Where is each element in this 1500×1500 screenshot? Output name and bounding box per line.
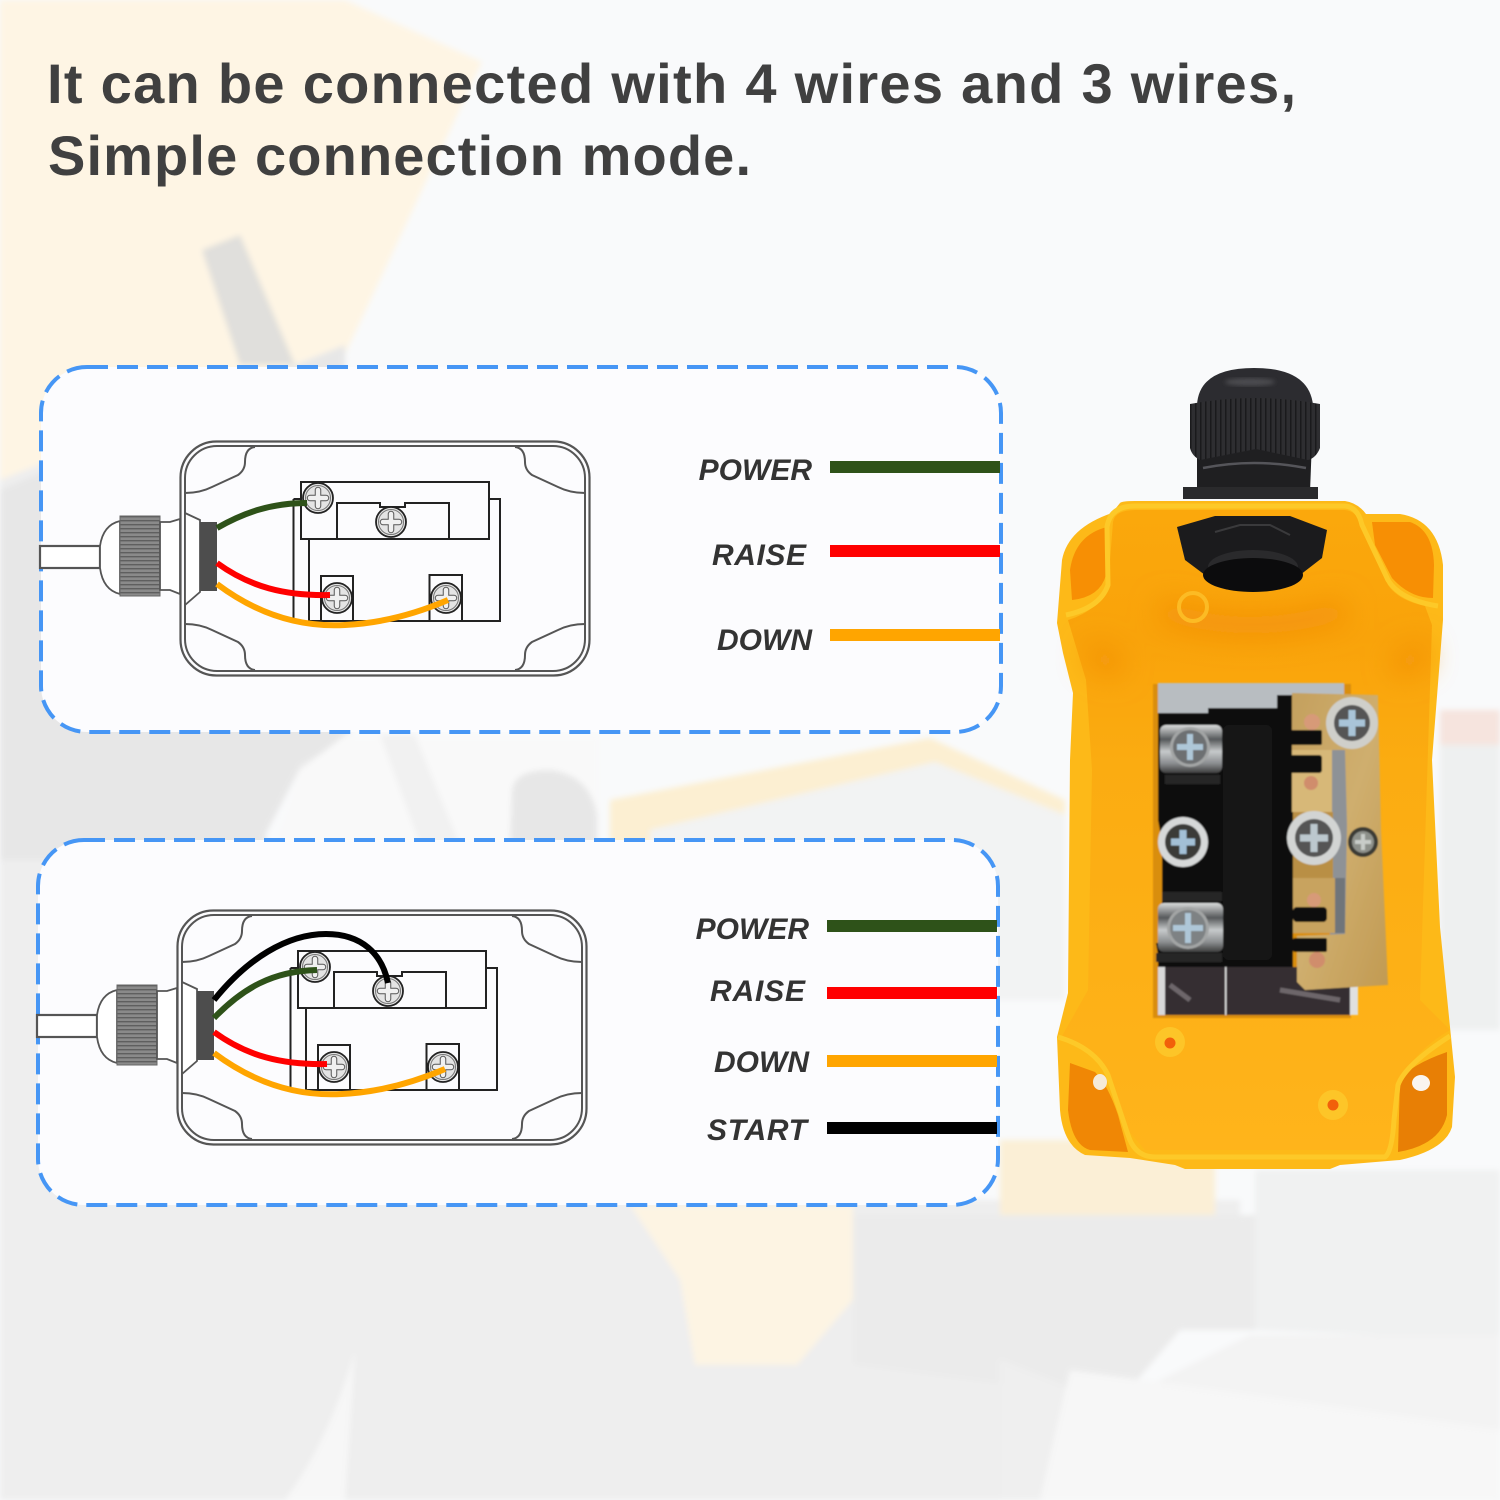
legend: three wires: RAISE — [712, 539, 807, 572]
legend: four wires: POWER — [696, 913, 809, 946]
legend: four wires: DOWN — [714, 1046, 810, 1079]
title — [47, 52, 1296, 187]
black switch housing — [1156, 695, 1293, 967]
legend: four wires: START — [707, 1114, 810, 1147]
switch assembly — [1153, 683, 1388, 1018]
legend: three wires — [699, 454, 1000, 657]
enclosure body — [1057, 501, 1455, 1169]
brass contacts — [1330, 750, 1347, 935]
mounting bosses — [1155, 593, 1348, 1120]
wiring diagram: four wires — [37, 910, 586, 1144]
enclosure pockets — [1068, 522, 1447, 1152]
wiring diagram: three wires — [40, 442, 590, 676]
cable gland — [1183, 368, 1320, 499]
legend: three wires: DOWN — [717, 624, 813, 657]
screw terminals — [1160, 725, 1222, 773]
gland lock nut — [1177, 516, 1327, 592]
photo: open yellow control box — [1057, 368, 1455, 1169]
enclosure interior — [1062, 510, 1450, 1150]
legend: four wires — [696, 913, 997, 1147]
legend: four wires: RAISE — [710, 975, 806, 1008]
enclosure rim highlights — [1058, 506, 1450, 1157]
title: Simple connection mode. — [48, 124, 751, 187]
panel: three-wire connection — [40, 367, 1001, 732]
legend: three wires: POWER — [699, 454, 812, 487]
panel: four-wire connection — [37, 840, 998, 1205]
title: It can be connected with 4 wires and 3 wires, — [47, 52, 1296, 115]
